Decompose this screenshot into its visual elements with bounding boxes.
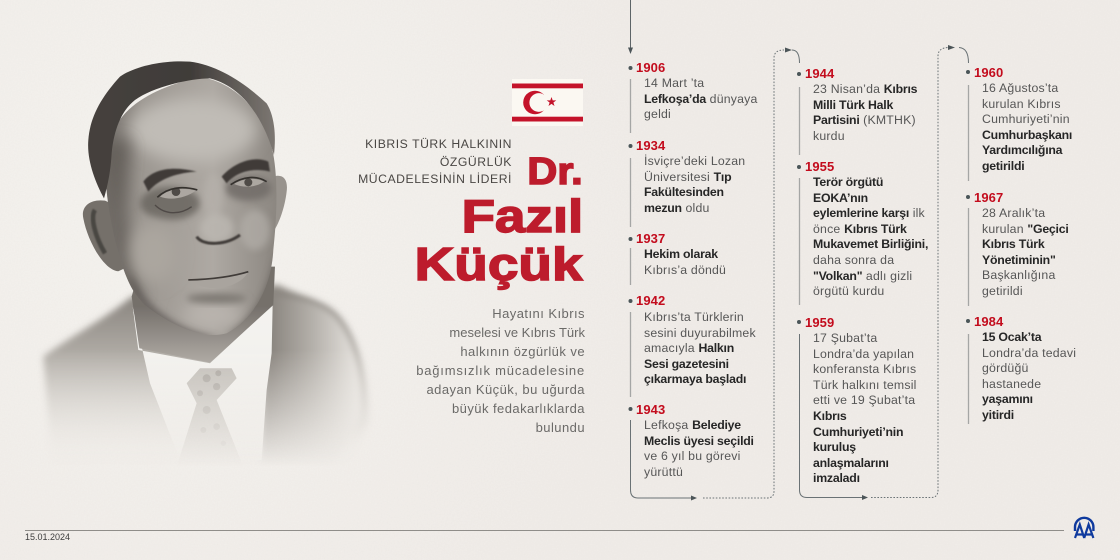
AA logo (1075, 518, 1093, 538)
infographic page: Yardımcılığına (982, 143, 1062, 157)
infographic page: 23 Nisan’da Kıbrıs (813, 82, 917, 96)
portrait photo (43, 61, 368, 480)
name: Fazıl: Fazıl (461, 190, 583, 242)
infographic page: Üniversitesi Tıp (644, 170, 731, 184)
timeline entry 1955 (805, 159, 928, 298)
timeline entry 1984 (974, 314, 1076, 422)
infographic page: örgütü kurdu (813, 284, 884, 298)
left ear (83, 200, 128, 271)
infographic page: Kıbrıs Türk (982, 237, 1044, 251)
timeline bars column 2 (798, 87, 800, 305)
suit jacket (40, 280, 369, 428)
infographic page: 1937 (636, 231, 665, 246)
infographic page: Mukavemet Birliğini, (813, 237, 928, 251)
timeline entry 1944 (805, 66, 917, 143)
left brow (143, 169, 197, 192)
neck (132, 267, 275, 363)
intro paragraph: meselesi ve Kıbrıs Türk (449, 325, 585, 340)
infographic page: Cumhuriyeti’nin (813, 425, 903, 439)
infographic page: hastanede (982, 377, 1041, 391)
infographic page: Cumhuriyeti’nin (982, 112, 1070, 126)
infographic page: gördüğü (982, 361, 1029, 375)
shirt (133, 305, 273, 460)
intro paragraph: büyük fedakarlıklarda (452, 401, 585, 416)
infographic page: yaşamını (982, 392, 1033, 406)
infographic page: Cumhurbaşkanı (982, 128, 1072, 142)
subtitle: MÜCADELESİNİN LİDERİ (358, 172, 512, 186)
infographic page: 1955 (805, 159, 834, 174)
connector from column 1 to column 2 (630, 48, 800, 500)
timeline bars column 1 (630, 79, 632, 397)
infographic page: Partisini (KMTHK) (813, 113, 916, 127)
infographic page: 1944 (805, 66, 834, 81)
infographic page: Türk halkını temsil (813, 378, 917, 392)
infographic page: 1943 (636, 402, 665, 417)
intro paragraph (416, 306, 585, 435)
subtitle: ÖZGÜRLÜK (440, 154, 512, 168)
infographic page: anlaşmalarını (813, 456, 889, 470)
infographic page: 1967 (974, 190, 1003, 205)
timeline entry 1960 (974, 65, 1072, 173)
timeline entry 1943 (636, 402, 754, 479)
left eye (155, 187, 197, 213)
subtitle: KIBRIS TÜRK HALKININ (365, 137, 512, 151)
timeline connector: top entry arrow (628, 0, 633, 54)
right brow (222, 159, 270, 183)
infographic page: konferansta Kıbrıs (813, 362, 916, 376)
infographic page: 16 Ağustos’ta (982, 81, 1058, 95)
infographic page: kurulan "Geçici (982, 222, 1069, 236)
intro paragraph: Hayatını Kıbrıs (492, 306, 585, 321)
portrait body, fading out (43, 285, 368, 480)
intro paragraph: halkının özgürlük ve (460, 344, 585, 359)
flag (512, 79, 583, 126)
infographic page: Kıbrıs (813, 409, 847, 423)
timeline entry 1959 (805, 315, 917, 485)
infographic page: imzaladı (813, 471, 860, 485)
infographic page: 1906 (636, 60, 665, 75)
infographic page: Yönetiminin" (982, 253, 1056, 267)
footer rule (25, 530, 1064, 532)
infographic page: getirildi (982, 284, 1023, 298)
infographic page: Milli Türk Halk (813, 98, 893, 112)
name: Dr.: Dr. (528, 151, 583, 193)
timeline bars column 3 (968, 85, 970, 424)
infographic page: Kıbrıs’a döndü (644, 263, 726, 277)
hair (88, 61, 275, 198)
mouth (188, 272, 248, 288)
infographic page: geldi (644, 107, 671, 121)
star (547, 97, 556, 106)
infographic page: EOKA’nın (813, 191, 868, 205)
necktie (183, 368, 236, 448)
infographic page: Londra’da tedavi (982, 346, 1076, 360)
right eye (231, 177, 267, 187)
infographic page: kuruluş (813, 440, 856, 454)
infographic page: Londra’da yapılan (813, 347, 914, 361)
infographic page: Meclis üyesi seçildi (644, 434, 754, 448)
infographic page: Fakültesinden (644, 185, 724, 199)
infographic page: sesini duyurabilmek (644, 326, 756, 340)
infographic page: "Volkan" adlı gizli (813, 269, 912, 283)
tie pattern (197, 370, 222, 430)
infographic page: çıkarmaya başladı (644, 372, 746, 386)
infographic page: 1984 (974, 314, 1003, 329)
infographic page: 14 Mart ’ta (644, 76, 704, 90)
nose (197, 235, 240, 243)
intro paragraph: adayan Küçük, bu uğurda (426, 382, 585, 397)
infographic page: amacıyla Halkın (644, 341, 734, 355)
infographic page: Kıbrıs’ta Türklerin (644, 310, 744, 324)
infographic page: Hekim olarak (644, 247, 718, 261)
infographic page: 28 Aralık’ta (982, 206, 1045, 220)
subtitle (358, 137, 512, 186)
infographic page: Lefkoşa’da dünyaya (644, 92, 758, 106)
infographic page: 1942 (636, 293, 665, 308)
infographic page: Terör örgütü (813, 175, 883, 189)
timeline entry 1934 (636, 138, 745, 215)
timeline entry 1937 (636, 231, 726, 277)
infographic page: 1960 (974, 65, 1003, 80)
infographic page: Başkanlığına (982, 268, 1056, 282)
intro paragraph: bağımsızlık mücadelesine (416, 363, 585, 378)
name: Küçük: Küçük (415, 238, 583, 290)
infographic page: 15 Ocak’ta (982, 330, 1041, 344)
infographic page: önce Kıbrıs Türk (813, 222, 907, 236)
infographic page: ve 6 yıl bu görevi (644, 449, 741, 463)
infographic page: 1959 (805, 315, 834, 330)
timeline dots (628, 66, 970, 411)
infographic page: eylemlerine karşı ilk (813, 206, 925, 220)
face shading (103, 98, 280, 343)
timeline entry 1906 (636, 60, 758, 121)
infographic page: getirildi (982, 159, 1024, 173)
infographic page: İsviçre’deki Lozan (644, 154, 745, 168)
infographic page: yitirdi (982, 408, 1014, 422)
infographic page: 17 Şubat’ta (813, 331, 877, 345)
infographic page: 1934 (636, 138, 665, 153)
crescent (523, 91, 547, 114)
infographic page: daha sonra da (813, 253, 894, 267)
infographic page: etti ve 19 Şubat’ta (813, 393, 915, 407)
infographic page: kurdu (813, 129, 845, 143)
face (103, 77, 280, 343)
infographic page: yürüttü (644, 465, 683, 479)
infographic page: kurulan Kıbrıs (982, 97, 1061, 111)
intro paragraph: bulundu (536, 420, 585, 435)
timeline entry 1967 (974, 190, 1069, 298)
infographic page: Lefkoşa Belediye (644, 418, 741, 432)
connector from column 2 to column 3 (800, 45, 968, 500)
infographic page: Sesi gazetesini (644, 357, 729, 371)
date: 15.01.2024 (25, 532, 70, 542)
infographic page: mezun oldu (644, 201, 710, 215)
right ear (273, 176, 287, 232)
timeline entry 1942 (636, 293, 756, 386)
